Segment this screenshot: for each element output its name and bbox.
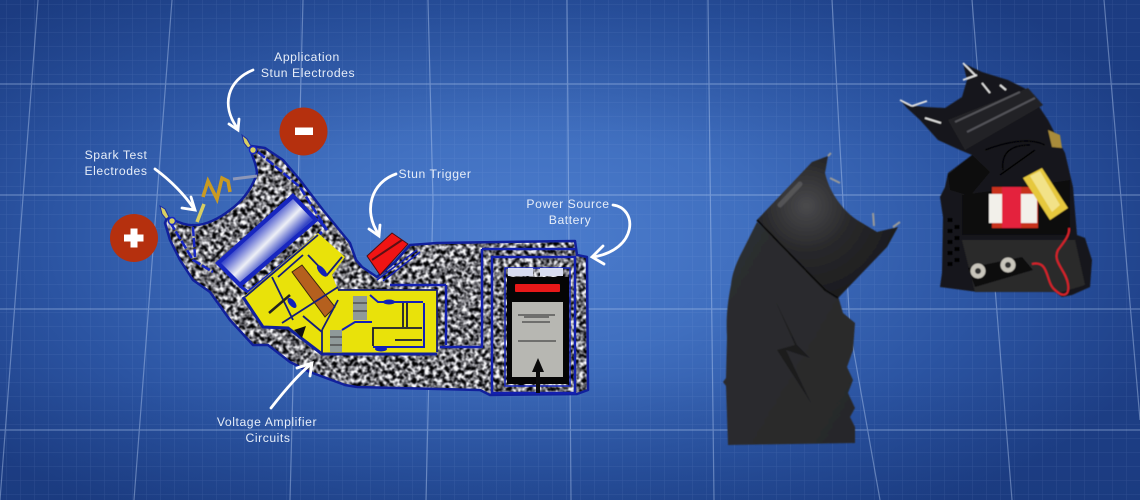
circuit traces — [245, 235, 437, 354]
device body speckled casing — [165, 146, 588, 395]
photo: opened stun gun — [900, 63, 1092, 297]
transformer — [992, 187, 1038, 228]
battery tray — [962, 240, 1085, 292]
head — [757, 156, 898, 298]
arrow: application electrodes — [228, 70, 253, 130]
battery compartment — [390, 249, 575, 393]
cavity — [962, 180, 1070, 235]
photo: closed stun gun — [723, 153, 900, 445]
label: application stun electrodes: Stun Electrodes — [261, 66, 355, 80]
arrow: spark test — [155, 169, 195, 210]
battery clip — [968, 257, 1033, 287]
internal parts — [900, 63, 1085, 295]
brown component — [292, 265, 335, 317]
label: voltage amplifier circuits: Circuits — [245, 431, 291, 445]
gray components — [353, 296, 367, 320]
arrow: battery — [592, 205, 630, 264]
label: voltage amplifier circuits: Voltage Amplifier — [217, 415, 317, 429]
yellow capacitor — [1023, 168, 1068, 220]
arrow: voltage amplifier — [271, 363, 312, 408]
stun trigger — [367, 233, 420, 281]
label: spark test electrodes: Electrodes — [84, 164, 148, 178]
label: spark test electrodes: Spark Test — [85, 148, 147, 162]
grip — [723, 222, 855, 445]
label: application stun electrodes: Application — [274, 50, 340, 64]
mount holes — [950, 218, 957, 273]
arrow: stun trigger — [369, 174, 396, 236]
diagram: stun gun cutaway — [160, 135, 588, 395]
label: power source battery: Power Source — [526, 197, 610, 211]
plus symbol — [110, 214, 158, 262]
label: stun trigger: Stun Trigger — [398, 167, 472, 181]
capacitor — [215, 193, 327, 292]
electrodes — [160, 135, 327, 272]
red wire — [1032, 228, 1069, 295]
triangle marker — [294, 326, 306, 338]
voltage amplifier circuit boards — [243, 233, 437, 354]
lightning bolt — [775, 300, 811, 403]
label: power source battery: Battery — [549, 213, 592, 227]
minus symbol — [280, 108, 328, 156]
